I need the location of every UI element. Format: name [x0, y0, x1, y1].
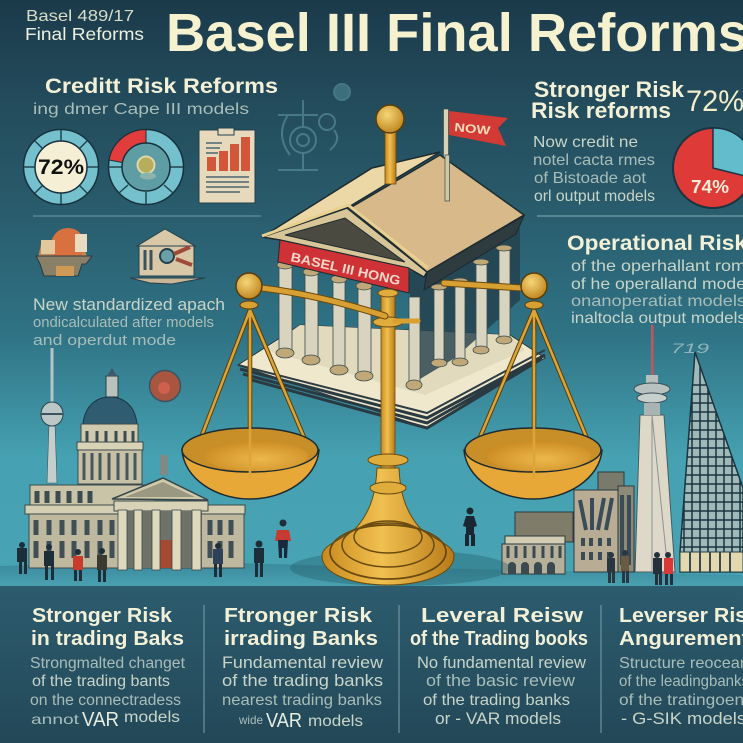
column: trading banks 1: models: [124, 709, 180, 726]
column: trading banks 2: models: [308, 713, 363, 730]
text: operational risk body: [571, 258, 743, 327]
column: leverage review: No fundamental review: [417, 654, 586, 672]
column: leverage review: or - VAR models: [435, 710, 561, 728]
column: leverage review: of the basic review: [426, 672, 575, 690]
column: trading banks 1: in trading Baks: [31, 627, 184, 650]
text: operational risk body: of he operalland mode: [571, 276, 743, 293]
flag: now: [444, 109, 508, 201]
pie chart: 74%: [673, 128, 743, 208]
column: trading banks 2: wide: [238, 713, 263, 727]
column: trading banks 2: VAR: [266, 710, 302, 732]
panel: credit risk reforms: [24, 75, 350, 204]
neoclassical building: [25, 455, 245, 570]
columns: [276, 245, 512, 390]
text: standardised approach: New standardized apach: [33, 295, 225, 314]
column: leverage requirement: Structure reocean: [619, 655, 743, 672]
icon: faint network symbol: [278, 84, 350, 170]
flag pole overlay: [445, 155, 450, 201]
column: trading banks 1: annot: [31, 711, 79, 727]
panel: bottom band: [0, 586, 743, 743]
building interior: [278, 228, 520, 385]
banner: basel iii: BASEL III HONG: [289, 249, 402, 288]
column: leverage requirement: [619, 604, 743, 728]
column: trading banks 1: on the connectradess: [30, 692, 181, 709]
people left: [17, 508, 477, 582]
scale shadow: [290, 550, 510, 586]
column: leverage review: of the Trading books: [410, 628, 588, 650]
pie chart: 74%: 74%: [691, 177, 729, 197]
divider left: [33, 216, 261, 217]
cityscape right: [502, 325, 743, 585]
column: trading banks 2: [222, 604, 383, 732]
column: trading banks 1: Stronger Risk: [32, 604, 173, 627]
scale base: [322, 468, 454, 585]
icon: person at desk: [36, 228, 92, 276]
column: leverage review: Leveral Reisw: [421, 604, 583, 627]
text: operational risk body: inaltocla output models: [571, 310, 743, 327]
roof side band: [424, 216, 524, 290]
column: trading banks 2: of the trading banks: [222, 672, 383, 690]
stacked paper base: [238, 325, 545, 428]
scale beam: [262, 283, 522, 321]
column: trading banks 1: [30, 604, 186, 731]
heading: stronger risk: [531, 77, 685, 123]
roof left face: [262, 152, 440, 237]
column: trading banks 2: nearest trading banks: [222, 692, 382, 709]
cityscape left: [25, 348, 245, 570]
parliament building: [238, 109, 545, 428]
text: standardised approach: and operdut mode: [33, 332, 176, 349]
text: stronger risk body: Now credit ne: [533, 134, 638, 151]
heading: credit risk: Creditt Risk Reforms: [45, 75, 278, 98]
panel: standardised approach: [33, 228, 225, 349]
text: stronger risk body: notel cacta rmes: [533, 152, 655, 169]
icon: 72% donut: 72%: [38, 156, 84, 179]
subheading: credit risk: ing dmer Cape III models: [33, 101, 249, 118]
pediment: [262, 208, 427, 277]
flag: now: NOW: [454, 120, 492, 138]
right pan: [464, 273, 602, 499]
column: leverage requirement: Angurement: [619, 627, 743, 650]
text: stronger risk body: orl output models: [534, 188, 655, 205]
tan office tower: [574, 472, 634, 572]
domed capitol: [77, 368, 143, 484]
faint number: 719: [671, 340, 709, 356]
column: trading banks 2: Fundamental review: [222, 654, 383, 672]
title: Basel III Final Reforms: [166, 3, 743, 63]
column: leverage review: [410, 604, 588, 728]
icon: 72% donut: [24, 130, 98, 204]
column: trading banks 2: irrading Banks: [224, 627, 378, 650]
text: stronger risk body: [533, 134, 655, 205]
scale finial: [376, 105, 404, 184]
icon: report with bar chart: [199, 128, 255, 203]
left pan: [182, 273, 319, 499]
tv tower left: [41, 348, 63, 483]
balance scale: [182, 105, 602, 585]
people right: [607, 550, 673, 585]
slim tower: [634, 325, 675, 572]
pediment ornament: [285, 218, 405, 262]
icon: red segment donut: [108, 129, 184, 204]
panel: stronger risk reforms: [531, 77, 743, 208]
column: trading banks 1: of the trading bants: [32, 673, 170, 690]
heading: stronger risk: Risk reforms: [531, 98, 671, 123]
ornament circle: [150, 370, 180, 402]
heading: stronger risk: Stronger Risk: [534, 77, 685, 102]
header label: Final Reforms: [25, 24, 144, 44]
glass pyramid skyscraper: [679, 352, 743, 573]
text: operational risk body: onanoperatiat models: [571, 293, 743, 310]
column: trading banks 1: Strongmalted changet: [30, 655, 186, 672]
text: stronger risk body: of Bistoade aot: [534, 170, 647, 187]
roof ridge highlight: [262, 205, 428, 268]
divider right: [537, 216, 743, 217]
column: leverage review: of the trading banks: [423, 692, 570, 709]
icon: bank with magnifier: [130, 229, 205, 284]
low building: [502, 512, 573, 574]
panel: operational risk: [567, 232, 743, 356]
column: leverage requirement: of the tratingoent: [619, 692, 743, 709]
text: standardised approach: [33, 295, 225, 349]
heading: operational risk: Operational Risk: [567, 232, 743, 255]
ground strip: [0, 563, 743, 588]
text: standardised approach: ondicalculated after models: [33, 315, 214, 331]
header label: Basel 489/17: [26, 8, 134, 25]
text: operational risk body: of the operhallant rom: [571, 258, 743, 275]
header label: [25, 8, 144, 44]
column: trading banks 2: Ftronger Risk: [224, 604, 373, 627]
column: trading banks 1: VAR: [82, 709, 119, 731]
scale pole: [368, 289, 408, 468]
banner: basel iii: [278, 240, 409, 293]
column: leverage requirement: - G-SIK models: [621, 710, 743, 728]
roof right face: [350, 155, 524, 272]
